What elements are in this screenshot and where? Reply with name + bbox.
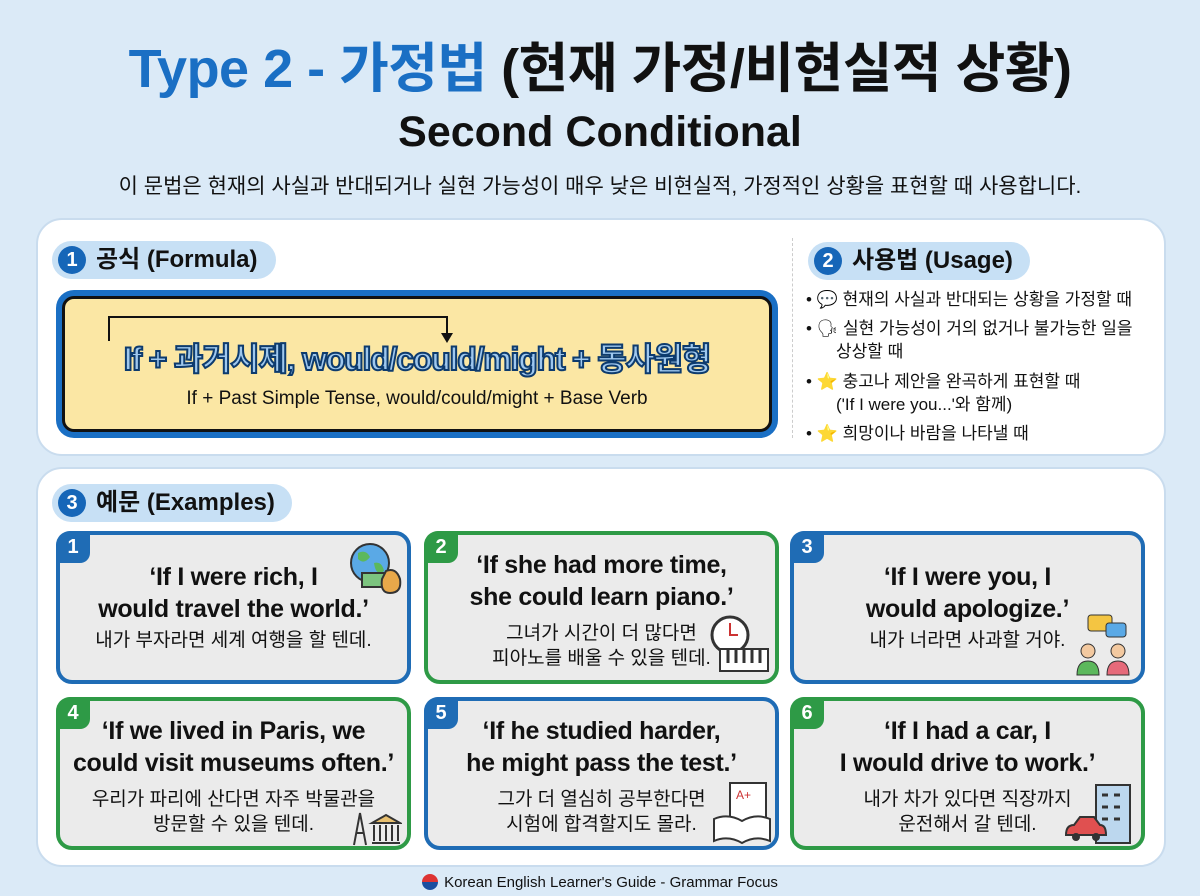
icon: two people talking	[1076, 614, 1130, 676]
footer: Korean English Learner's Guide - Grammar Focus	[444, 874, 778, 891]
usage list: • ⭐ 희망이나 바람을 나타낼 때	[806, 424, 1029, 443]
icon: test paper and book: A+	[736, 788, 751, 802]
usage list: ('If I were you...'와 함께)	[836, 395, 1012, 414]
card 3: ‘If I were you, I	[884, 563, 1051, 591]
card 2: 2	[435, 536, 447, 558]
card 6: 내가 차가 있다면 직장까지	[863, 789, 1072, 810]
icon: globe and money	[350, 543, 402, 594]
usage list: • 🗣 실현 가능성이 거의 없거나 불가능한 일을	[806, 319, 1132, 338]
card 2	[424, 531, 779, 684]
heading: formula: 공식 (Formula)	[96, 246, 258, 273]
card 5	[424, 697, 779, 850]
card 2: 피아노를 배울 수 있을 텐데.	[492, 648, 711, 669]
card 2: ‘If she had more time,	[476, 551, 727, 579]
formula box	[56, 290, 778, 438]
card 3: 내가 너라면 사과할 거야.	[870, 630, 1065, 651]
card 6: 운전해서 갈 텐데.	[898, 814, 1037, 835]
usage list: • 💬 현재의 사실과 반대되는 상황을 가정할 때	[806, 290, 1132, 309]
icon: car and office	[1065, 784, 1131, 844]
icon: test paper and book	[713, 782, 771, 844]
card 5: 그가 더 열심히 공부한다면	[497, 789, 706, 810]
usage list: 상상할 때	[836, 342, 903, 361]
heading: usage	[808, 242, 1030, 280]
card 1: 1	[67, 536, 79, 558]
heading: usage: 2	[822, 250, 834, 272]
card 6: ‘If I had a car, I	[884, 717, 1051, 745]
panel: examples	[36, 467, 1166, 867]
panel: formula and usage	[36, 218, 1166, 456]
heading: examples: 3	[66, 492, 78, 514]
card 3	[790, 531, 1145, 684]
card 1: 내가 부자라면 세계 여행을 할 텐데.	[95, 630, 372, 651]
card 1	[56, 531, 411, 684]
card 2: she could learn piano.’	[470, 583, 734, 611]
card 5: 시험에 합격할지도 몰라.	[506, 814, 697, 835]
card 4: ‘If we lived in Paris, we	[102, 717, 365, 745]
formula text: If + 과거시제, would/could/might + 동사원형	[124, 341, 710, 377]
card 5: ‘If he studied harder,	[483, 717, 720, 745]
usage list: • ⭐ 충고나 제안을 완곡하게 표현할 때	[806, 372, 1080, 391]
card 4: 4	[67, 702, 79, 724]
card 6	[790, 697, 1145, 850]
arrow	[108, 316, 453, 343]
card 3: would apologize.’	[866, 595, 1069, 623]
card 1: ‘If I were rich, I	[149, 563, 318, 591]
heading: formula	[52, 241, 276, 279]
card 1: would travel the world.’	[98, 595, 369, 623]
card 6: I would drive to work.’	[840, 749, 1095, 777]
card 4: 우리가 파리에 산다면 자주 박물관을	[92, 789, 375, 810]
title: Type 2 - 가정법 (현재 가정/비현실적 상황)	[129, 39, 1071, 99]
usage list	[806, 290, 1132, 443]
card 5: he might pass the test.’	[466, 749, 737, 777]
card 3: 3	[801, 536, 813, 558]
icon: eiffel tower and museum	[353, 812, 402, 846]
card 4	[56, 697, 411, 850]
icon: clock and piano	[710, 616, 769, 672]
formula box: If + Past Simple Tense, would/could/might + Base Verb	[186, 388, 648, 409]
card 4: 방문할 수 있을 텐데.	[153, 814, 314, 835]
card 6: 6	[801, 702, 813, 724]
card 2: 그녀가 시간이 더 많다면	[506, 623, 697, 644]
heading: usage: 사용법 (Usage)	[852, 247, 1013, 274]
card 4: could visit museums often.’	[73, 749, 394, 777]
description: 이 문법은 현재의 사실과 반대되거나 실현 가능성이 매우 낮은 비현실적, 가정적인 상황을 표현할 때 사용합니다.	[119, 175, 1081, 198]
heading: formula: 1	[66, 249, 78, 271]
heading: examples: 예문 (Examples)	[96, 489, 275, 516]
subtitle: Second Conditional	[398, 108, 802, 156]
card 5: 5	[435, 702, 447, 724]
heading: examples	[52, 484, 292, 522]
